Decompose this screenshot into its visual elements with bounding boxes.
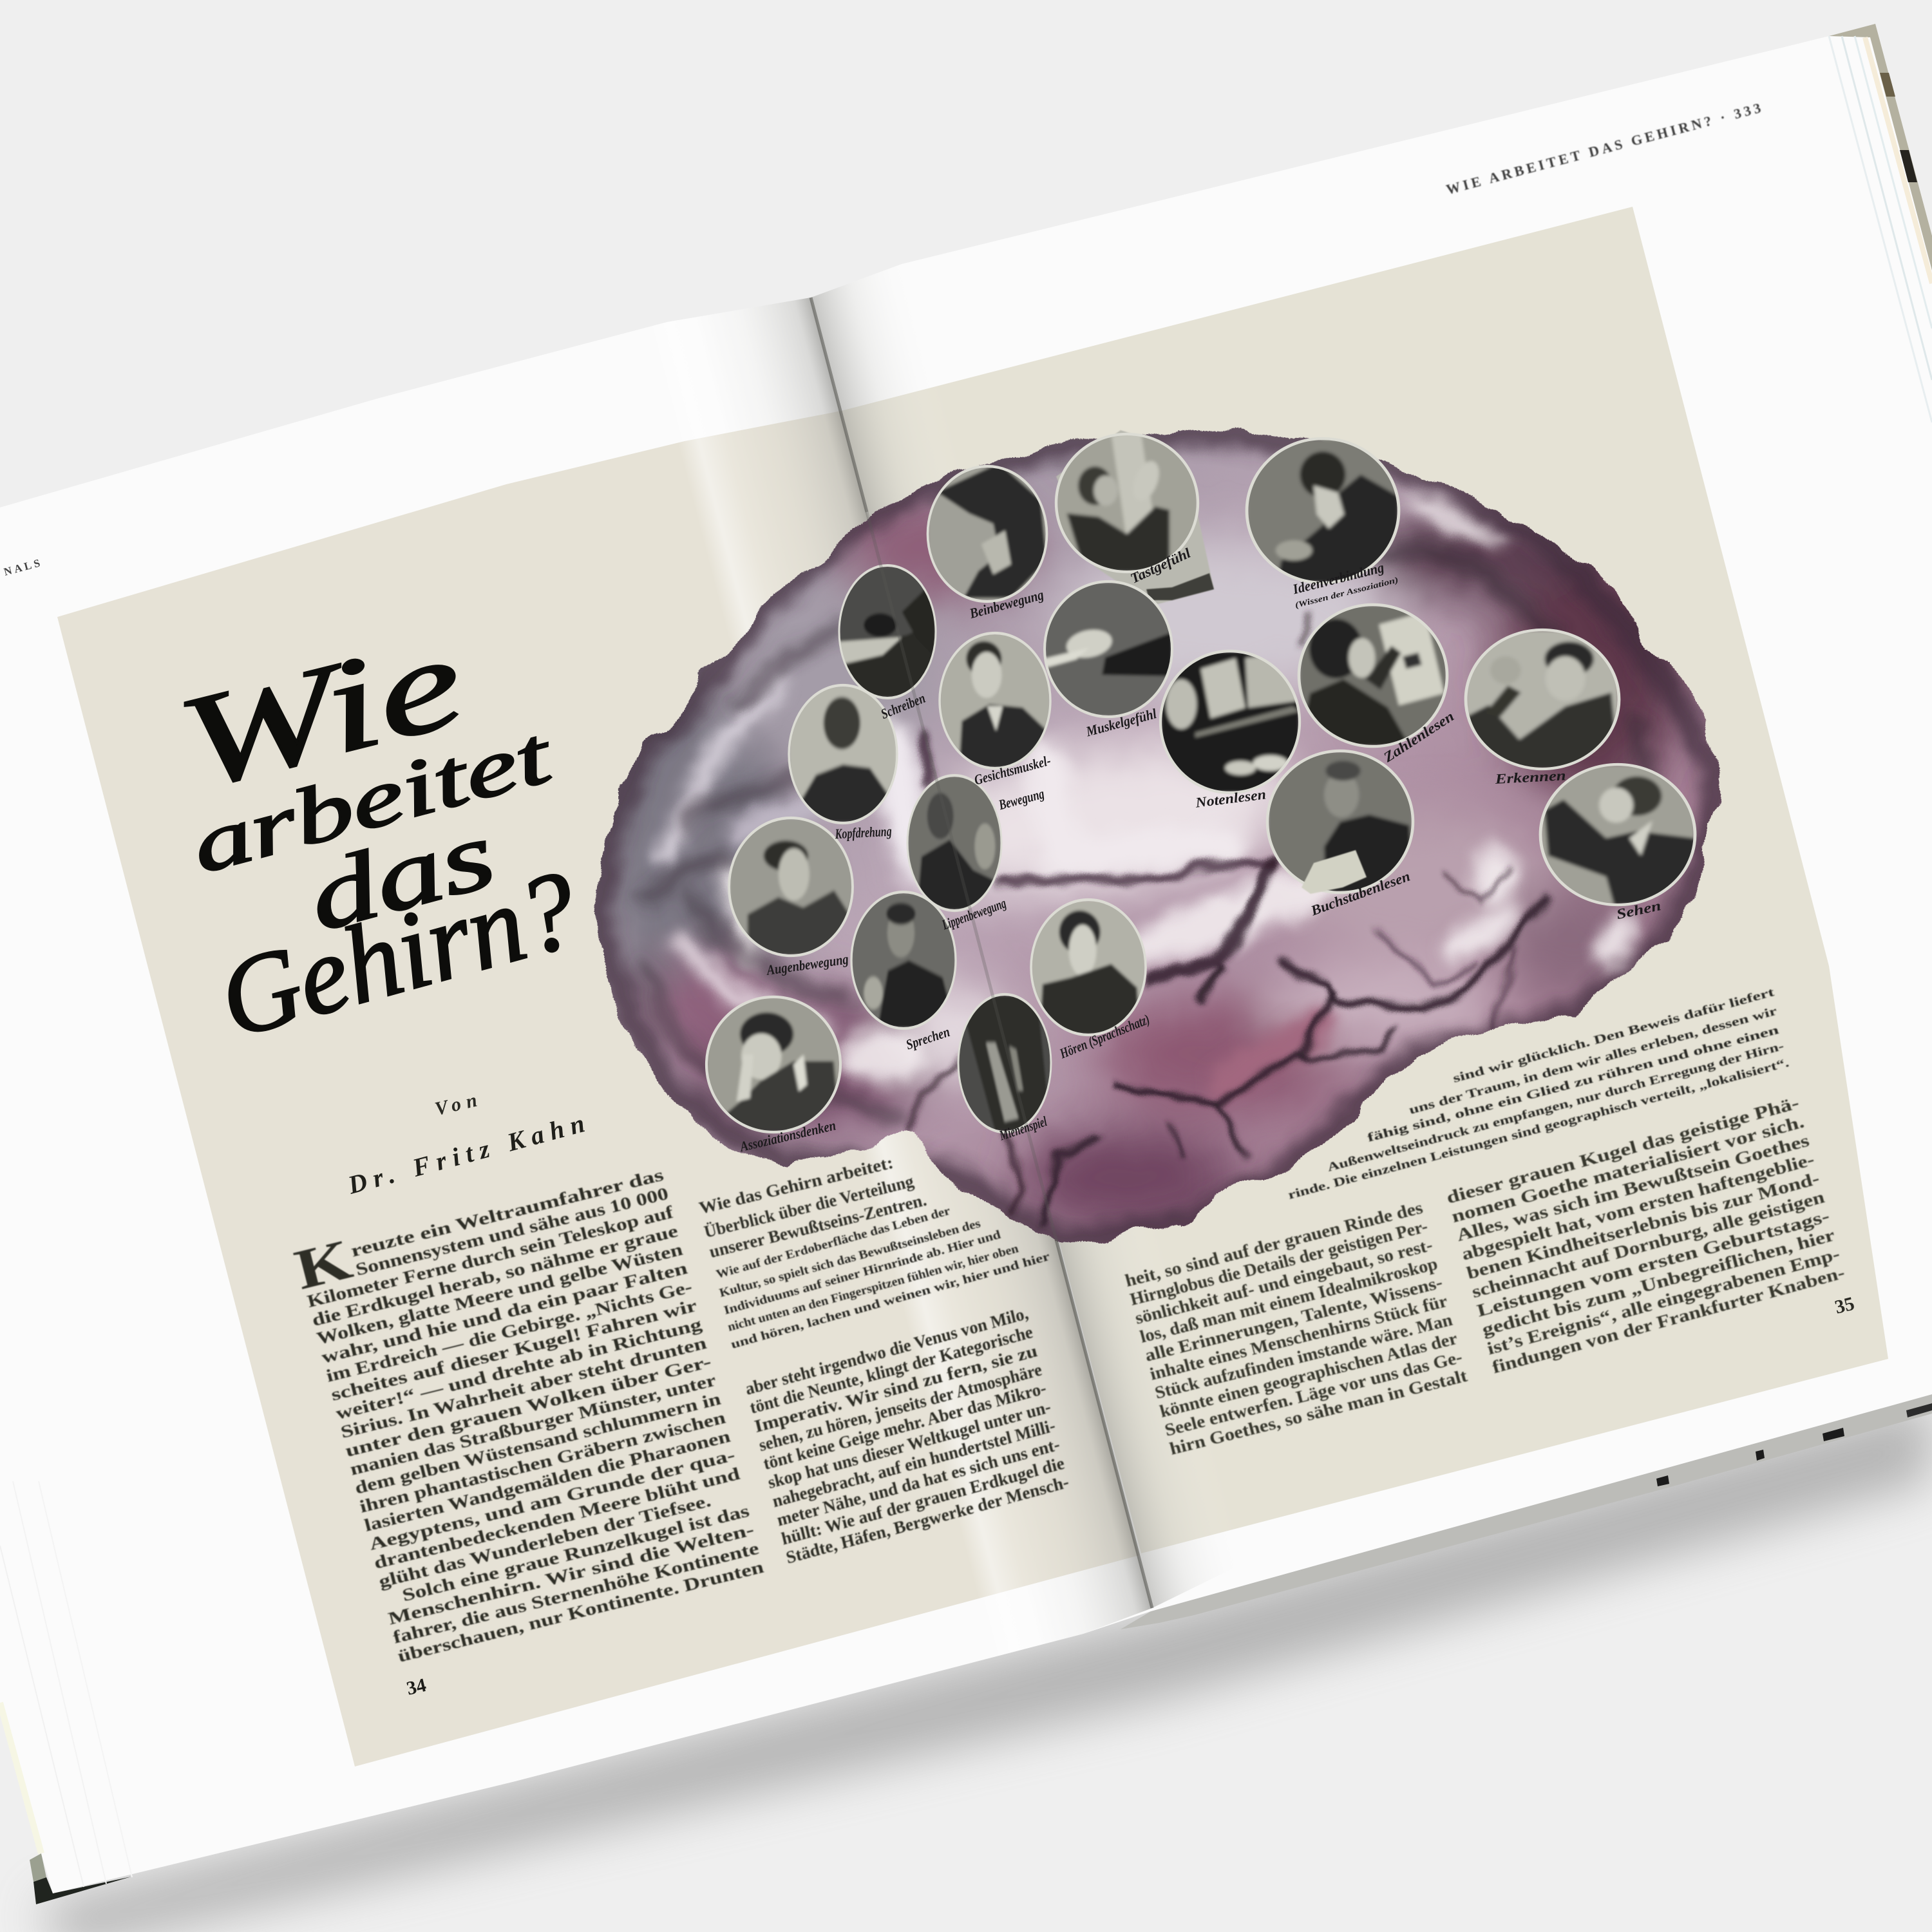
text column 3: los, daß man mit einem Idealmikroskop: [1138, 1254, 1439, 1347]
text column 2: hüllt: Wie auf der grauen Erdkugel die: [779, 1453, 1066, 1549]
medallion labels: [737, 544, 1662, 1155]
gutter shading: [0, 225, 1397, 1893]
medallion: Gesichtsmuskel-Bewegung: [940, 633, 1050, 768]
sidebar caption: [697, 1153, 1052, 1352]
medallion labels: Erkennen: [1494, 767, 1566, 787]
medallion: Schreiben: [839, 565, 936, 698]
text column 2: tönt keine Geige mehr. Aber das Mikro-: [761, 1378, 1048, 1473]
medallion: Zahlenlesen: [1299, 605, 1447, 746]
text column 4: abgespielt hat, vom ersten haftengeblie-: [1459, 1150, 1816, 1264]
text column 4: nomen Goethe materialisiert vor sich.: [1450, 1112, 1806, 1226]
medallion labels: Sehen: [1615, 897, 1662, 922]
running head right: WIE ARBEITET DAS GEHIRN? · 333: [1444, 100, 1763, 198]
medallion labels: (Wissen der Assoziation): [1294, 574, 1399, 610]
medallion: Ideenverbindung: [1247, 439, 1399, 583]
text column 3: alle Erinnerungen, Talente, Wissens-: [1143, 1273, 1444, 1365]
title: Wie: [165, 607, 477, 818]
page number 35: 35: [1833, 1293, 1857, 1318]
panel: left page print area: [57, 411, 1139, 1766]
text column 1: reuzte ein Weltraumfahrer das: [349, 1165, 665, 1260]
sidebar caption: und hören, lachen und weinen wir, hier und hier: [730, 1249, 1052, 1352]
text column 1: scheites auf dieser Kugel! Fahren wir: [329, 1296, 699, 1405]
sidebar caption: Wie das Gehirn arbeitet:: [697, 1153, 895, 1218]
medallion: Muskelgefühl: [1041, 582, 1172, 717]
text column 1: überschauen, nur Kontinente. Drunten: [395, 1557, 766, 1666]
medallion: Sprechen: [851, 892, 956, 1028]
text column 1: glüht das Wunderleben der Tiefsee.: [377, 1491, 713, 1591]
medallion labels: Zahlenlesen: [1380, 708, 1457, 766]
text column 3: hirn Goethes, so sähe man in Gestalt: [1168, 1366, 1469, 1459]
title: [165, 607, 591, 1062]
gyri highlights: [708, 484, 1646, 1097]
caption right of brain: uns der Traum, in dem wir alles erleben, dessen wir: [1408, 1004, 1779, 1117]
text column 1: fahrer, die aus Sternenhöhe Kontinente: [391, 1539, 761, 1647]
text column 1: ihren phantastischen Gräbern zwischen: [357, 1408, 728, 1517]
text column 4: gedicht bis zum „Unbegreiflichen, hier: [1480, 1225, 1837, 1340]
text column 3: inhalte eines Menschenhirns Stück für: [1148, 1291, 1450, 1384]
text column 1: Menschenhirn. Wir sind die Welten-: [386, 1520, 756, 1629]
medallion: Sehen: [1540, 764, 1695, 905]
sidebar caption: nicht unten an den Fingerspitzen fühlen wir, hier oben: [726, 1242, 1020, 1334]
text column 2: Städte, Häfen, Bergwerke der Mensch-: [784, 1472, 1071, 1567]
medallion labels: Notenlesen: [1194, 786, 1267, 811]
sidebar caption: Individuums auf seiner Hirnrinde ab. Hier und: [723, 1228, 1003, 1318]
text column 4: ist’s Ereignis“, alle eingegrabenen Emp-: [1485, 1244, 1842, 1358]
medallion labels: Augenbewegung: [764, 951, 849, 978]
title: Gehirn?: [207, 847, 591, 1062]
medallion labels: Tastgefühl: [1128, 544, 1193, 587]
cover edge patches: [1880, 73, 1917, 182]
text column 1: Kilometer Ferne durch sein Teleskop auf: [305, 1202, 676, 1311]
text column 1: dem gelben Wüstensand schlummern in: [353, 1389, 723, 1498]
medallion labels: Beinbewegung: [967, 586, 1045, 621]
text column 1: Aegyptens, und am Grunde der qua-: [367, 1445, 737, 1554]
medallion: Hören: [1031, 900, 1146, 1035]
sidebar caption: unserer Bewußtseins-Zentren.: [707, 1190, 929, 1262]
text column 1: [289, 1150, 766, 1667]
text column 3: sönlichkeit auf- und eingebaut, so rest-: [1133, 1235, 1435, 1328]
caption right of brain: sind wir glücklich. Den Beweis dafür liefert: [1452, 985, 1776, 1086]
sidebar caption: Wie auf der Erdoberfläche das Leben der: [715, 1204, 952, 1282]
text column 1: K: [289, 1228, 358, 1302]
soft folds: [644, 547, 1649, 1121]
text column 4: benen Kindheitserlebnis bis zur Mond-: [1464, 1168, 1821, 1283]
text column 1: weiter!“ — und drehte ab in Richtung: [334, 1314, 704, 1423]
text column 2: Imperativ. Wir sind zu fern, sie zu: [752, 1341, 1039, 1436]
text column 3: Seele entwerfen. Läge vor uns das Ge-: [1162, 1347, 1464, 1440]
text column 2: tönt die Neunte, klingt der Kategorische: [748, 1322, 1035, 1417]
medallion: Kopfdrehung: [789, 685, 897, 823]
brain illustration: [580, 412, 1739, 1262]
light gyri bands: [663, 683, 1320, 1082]
medallion labels: Schreiben: [878, 690, 927, 722]
text column 2: aber steht irgendwo die Venus von Milo,: [743, 1303, 1030, 1399]
medallion: Buchstabenlesen: [1267, 751, 1413, 894]
byline: Dr. Fritz Kahn: [345, 1108, 587, 1200]
medallion labels: Kopfdrehung: [834, 823, 892, 842]
caption right of brain: rinde. Die einzelnen Leistungen sind geographisch verteilt, „lokalisiert“.: [1287, 1056, 1790, 1202]
text column 4: findungen von der Frankfurter Knaben-: [1490, 1263, 1847, 1378]
text column 4: dieser grauen Kugel das geistige Phä-: [1444, 1093, 1801, 1208]
medallion labels: Sprechen: [904, 1023, 952, 1053]
medallion: Erkennen: [1466, 630, 1619, 769]
byline: Von: [433, 1090, 479, 1120]
text column 4: [1444, 1093, 1847, 1378]
medallion labels: Mienenspiel: [997, 1113, 1049, 1144]
medallion: Beinbewegung: [927, 463, 1047, 601]
medallion labels: Hören (Sprachschatz): [1057, 1011, 1151, 1062]
text column 4: Leistungen vom ersten Geburtstags-: [1475, 1206, 1832, 1321]
text column 2: meter Nähe, und da hat es sich uns ent-: [775, 1434, 1062, 1530]
medallion: Notenlesen: [1160, 651, 1300, 793]
medallion: Tastgefühl: [1056, 431, 1198, 572]
medallion: Lippenbewegung: [907, 775, 1001, 911]
text column 1: drantenbedeckenden Meere blüht und: [372, 1464, 742, 1573]
title: das: [298, 800, 506, 952]
text column 2: [743, 1303, 1071, 1567]
medallion labels: Lippenbewegung: [940, 895, 1009, 933]
title: arbeitet: [183, 710, 562, 891]
panel: right page print area: [841, 207, 1888, 1553]
medallion labels: Muskelgefühl: [1084, 705, 1159, 740]
text column 1: lasierten Wandgemälden die Pharaonen: [363, 1426, 732, 1535]
text column 3: [1123, 1198, 1469, 1459]
sidebar caption: Überblick über die Verteilung: [702, 1171, 916, 1242]
medallion: Augenbewegung: [729, 818, 853, 956]
text column 3: Hirnglobus die Details der geistigen Per-: [1128, 1217, 1430, 1309]
gray arch behind Tastgefühl medallion: [1056, 430, 1214, 605]
medallion labels: Buchstabenlesen: [1308, 868, 1412, 919]
text column 3: Stück aufzufinden imstande wäre. Man: [1153, 1310, 1454, 1403]
dark fringe under Tastgefühl: [1146, 573, 1214, 600]
text column 1: die Erdkugel herab, so nähme er graue: [310, 1221, 680, 1330]
text column 1: Sirius. In Wahrheit aber steht drunten: [339, 1333, 708, 1442]
text column 2: skop hat uns dieser Weltkugel unter un-: [766, 1397, 1053, 1492]
text column 1: manien das Straßburger Münster, unter: [348, 1370, 718, 1479]
medallion labels: Assoziationsdenken: [737, 1117, 837, 1155]
sidebar caption: Kultur, so spielt sich das Bewußtseinsleben des: [718, 1217, 982, 1300]
medallion labels: Gesichtsmuskel-: [972, 752, 1052, 788]
medallion: Mienenspiel: [958, 994, 1051, 1132]
text column 1: unter den grauen Wolken über Ger-: [343, 1352, 713, 1461]
text column 3: könnte einen geographischen Atlas der: [1158, 1329, 1459, 1421]
text column 1: Sonnensystem und sähe aus 10 000: [354, 1184, 670, 1279]
gutter line: [811, 298, 1152, 1608]
medallion labels: Ideenverbindung: [1291, 559, 1386, 598]
medallion labels: Bewegung: [996, 785, 1046, 813]
text column 1: Wolken, glatte Meere und gelbe Wüsten: [315, 1240, 685, 1349]
outline rim shading: [598, 430, 1718, 1243]
text column 2: nahegebracht, auf ein hundertstel Milli-: [770, 1416, 1057, 1511]
text column 4: Alles, was sich im Bewußtsein Goethes: [1455, 1131, 1812, 1245]
caption right of brain: fähig sind, ohne ein Glied zu rühren und ohne einen: [1366, 1023, 1781, 1145]
page number 34: 34: [404, 1674, 428, 1700]
text column 3: heit, so sind auf der grauen Rinde des: [1123, 1198, 1425, 1291]
running head left: NALS: [3, 556, 44, 578]
text column 1: Solch eine graue Runzelkugel ist das: [400, 1501, 752, 1605]
caption right of brain: Außenweltseindruck zu empfangen, nur durch Erregung der Hirn-: [1326, 1039, 1785, 1175]
text column 4: scheinnacht auf Dornburg, alle geistigen: [1470, 1188, 1826, 1302]
text column 1: im Erdreich — die Gebirge. „Nichts Ge-: [324, 1277, 694, 1386]
medallion: Assoziationsdenken: [706, 997, 840, 1132]
text column 1: wahr, und hie und da ein paar Falten: [319, 1258, 689, 1367]
text column 2: sehen, zu hören, jenseits der Atmosphäre: [757, 1359, 1044, 1455]
caption right of brain: [1287, 985, 1790, 1202]
book shadow: [39, 1397, 1932, 1932]
sulci: [908, 612, 1547, 1224]
